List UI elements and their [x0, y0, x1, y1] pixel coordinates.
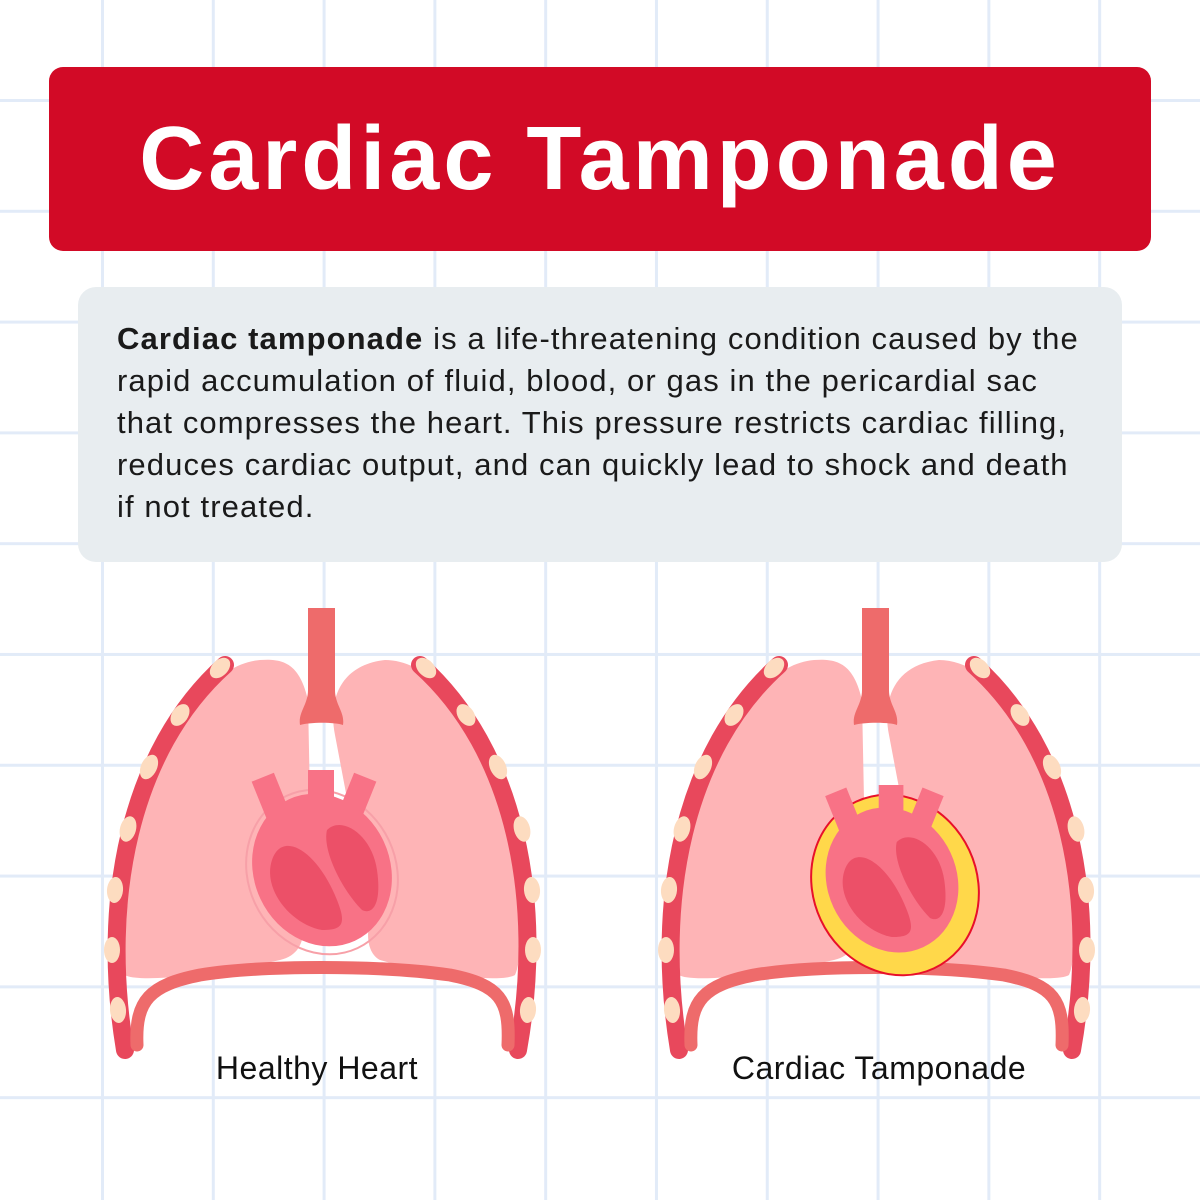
description text block: that compresses the heart. This pressure restricts cardiac filling,: [117, 405, 1067, 440]
title: [49, 67, 1151, 251]
description text block: if not treated.: [117, 489, 314, 524]
description text block: reduces cardiac output, and can quickly lead to shock and death: [117, 447, 1069, 482]
description text block: [78, 287, 1122, 562]
label: cardiac tamponade: Cardiac Tamponade: [732, 1050, 1026, 1086]
description text block: rapid accumulation of fluid, blood, or gas in the pericardial sac: [117, 363, 1038, 398]
title: Cardiac Tamponade: [139, 109, 1061, 209]
illustration: healthy heart: [104, 608, 541, 1050]
illustration: cardiac tamponade: [658, 608, 1095, 1050]
description text block: Cardiac tamponade is a life-threatening condition caused by the: [117, 321, 1079, 356]
label: healthy heart: Healthy Heart: [216, 1050, 418, 1086]
